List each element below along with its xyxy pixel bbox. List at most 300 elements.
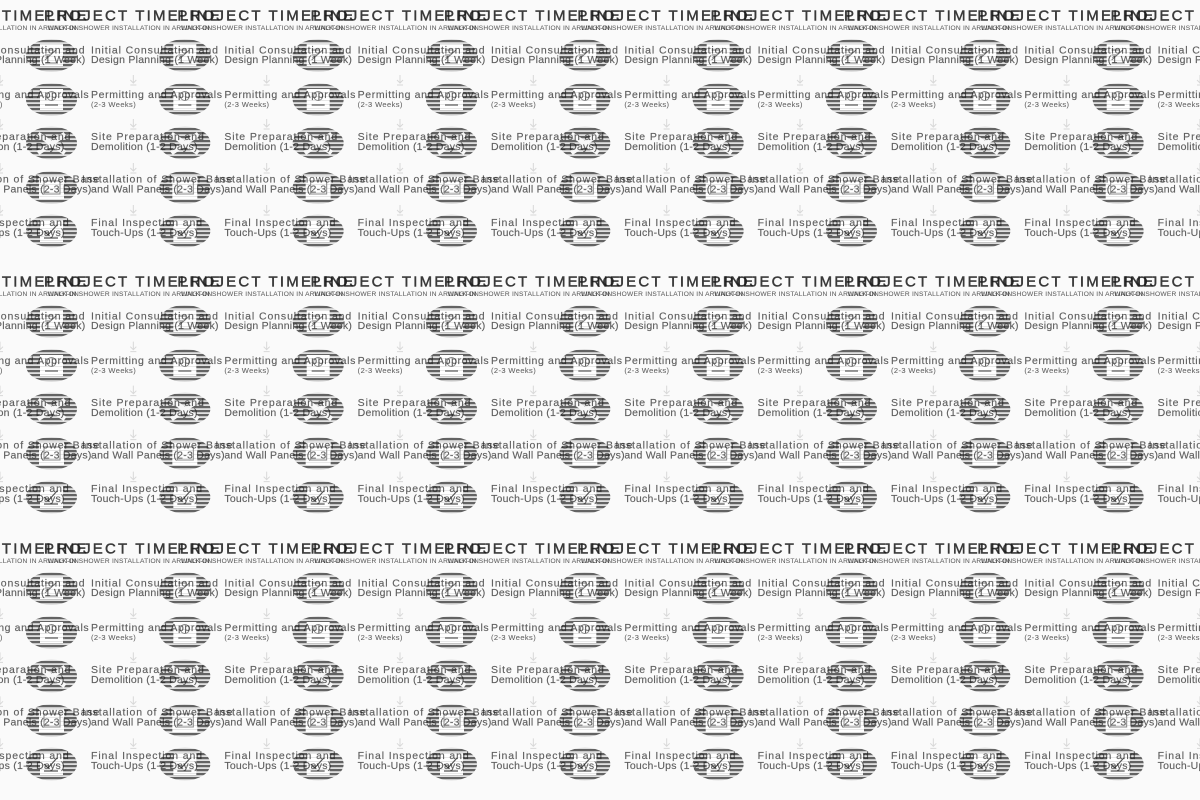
text tile r1c3: Initial Consultation and	[358, 44, 486, 56]
text tile r2c4: (2-3 Weeks)	[491, 366, 536, 375]
text tile r1c8: Initial Consultation and	[1024, 44, 1152, 56]
text tile r2c1: PROJECT TIMELINE	[44, 274, 222, 290]
text tile r3c1: Site Preparation and	[91, 664, 205, 676]
text tile r2c9	[1111, 274, 1200, 505]
text tile r1c4	[444, 8, 634, 239]
text tile r2c1: Final Inspection and	[91, 483, 203, 495]
text tile r2c8: Demolition (1-2 Days)	[1024, 407, 1131, 419]
text tile r1c7: Demolition (1-2 Days)	[891, 141, 998, 153]
text tile r3c1: Final Inspection and	[91, 750, 203, 762]
text tile r2c6: Design Planning (1 Week)	[758, 320, 885, 332]
text tile r1c5: PROJECT TIMELINE	[577, 8, 755, 24]
text tile r3c5: Site Preparation and	[624, 664, 738, 676]
text tile r2c7: Permitting and Approvals	[891, 355, 1023, 367]
text tile r2c5: Permitting and Approvals	[624, 355, 756, 367]
text tile r3c7: WALK-IN SHOWER INSTALLATION IN ARLINGTON	[848, 558, 1012, 565]
text tile r3c5: Touch-Ups (1-2 Days)	[624, 760, 731, 772]
text tile r1c5: Initial Consultation and	[624, 44, 752, 56]
text tile r2c1: (2-3 Weeks)	[91, 366, 136, 375]
text tile r2c4: Touch-Ups (1-2 Days)	[491, 493, 598, 505]
text tile r1c4: Design Planning (1 Week)	[491, 54, 619, 66]
text tile r3c4: Permitting and Approvals	[491, 622, 623, 634]
text tile r1c9	[1111, 8, 1200, 239]
text tile r3c6: Touch-Ups (1-2 Days)	[758, 760, 865, 772]
text tile r2c8: PROJECT TIMELINE	[977, 274, 1155, 290]
text tile r3c7: and Wall Panels (2-3 Days)	[891, 716, 1025, 728]
text tile r1c3: Site Preparation and	[358, 131, 471, 143]
text tile r1c4: Permitting and Approvals	[491, 89, 623, 101]
text tile r3c3: Installation of Shower Base	[349, 706, 500, 718]
text tile r1c5: Design Planning (1 Week)	[624, 54, 752, 66]
text tile r2c5: Touch-Ups (1-2 Days)	[624, 493, 731, 505]
text tile r1c7: Final Inspection and	[891, 217, 1003, 229]
text tile r1c0	[0, 8, 100, 239]
text tile r2c4	[444, 274, 634, 505]
text tile r3c3: and Wall Panels (2-3 Days)	[358, 716, 492, 728]
text tile r2c7: (2-3 Weeks)	[891, 366, 936, 375]
text tile r1c3	[311, 8, 500, 239]
text tile r2c1: Installation of Shower Base	[82, 440, 234, 452]
icons: striped circles, row 2	[26, 305, 1144, 514]
arrows: step connectors, row 3	[0, 608, 1200, 748]
text tile r1c2: Design Planning (1 Week)	[224, 54, 352, 66]
text tile r3c3: Touch-Ups (1-2 Days)	[358, 760, 465, 772]
text tile r3c5	[577, 540, 767, 772]
text tile r1c1: Demolition (1-2 Days)	[91, 141, 198, 153]
text tile r1c4: Initial Consultation and	[491, 44, 619, 56]
text tile r2c5	[577, 274, 767, 505]
text tile r1c6	[711, 8, 900, 239]
text tile r2c2: Permitting and Approvals	[224, 355, 356, 367]
text tile r1c8: Demolition (1-2 Days)	[1024, 141, 1131, 153]
text tile r3c5: Design Planning (1 Week)	[624, 587, 752, 599]
text tile r2c6	[711, 274, 900, 505]
text tile r2c7: Design Planning (1 Week)	[891, 320, 1019, 332]
text tile r2c6: PROJECT TIMELINE	[711, 274, 889, 290]
text tile r3c5: Final Inspection and	[624, 750, 736, 762]
text tile r2c7: WALK-IN SHOWER INSTALLATION IN ARLINGTON	[848, 291, 1012, 298]
text tile r3c7	[844, 540, 1034, 772]
text tile r1c2: (2-3 Weeks)	[224, 100, 270, 109]
text tile r3c6: Final Inspection and	[758, 750, 870, 762]
text tile r1c5: Installation of Shower Base	[615, 174, 767, 186]
text tile r3c6: Initial Consultation and	[758, 578, 886, 590]
text tile r2c2: Initial Consultation and	[224, 310, 352, 322]
text tile r3c8: Site Preparation and	[1024, 664, 1138, 676]
text tile r3c8: Installation of Shower Base	[1015, 706, 1167, 718]
text tile r2c4: Installation of Shower Base	[482, 440, 634, 452]
text tile r1c3: PROJECT TIMELINE	[311, 8, 489, 24]
text tile r1c2: Site Preparation and	[224, 131, 338, 143]
text tile r3c1: and Wall Panels (2-3 Days)	[91, 716, 225, 728]
text tile r3c5: Installation of Shower Base	[615, 706, 767, 718]
text tile r1c2: PROJECT TIMELINE	[177, 8, 355, 24]
text tile r1c4: Demolition (1-2 Days)	[491, 141, 598, 153]
text tile r2c8: and Wall Panels (2-3 Days)	[1024, 450, 1158, 462]
text tile r1c8: Installation of Shower Base	[1015, 174, 1167, 186]
text tile r2c7	[844, 274, 1034, 505]
text tile r1c2: Demolition (1-2 Days)	[224, 141, 331, 153]
text tile r2c5: Site Preparation and	[624, 397, 738, 409]
text tile r3c1: Demolition (1-2 Days)	[91, 674, 198, 686]
text tile r3c7: PROJECT TIMELINE	[844, 540, 1022, 558]
text tile r2c2: PROJECT TIMELINE	[177, 274, 355, 290]
text tile r1c3: and Wall Panels (2-3 Days)	[358, 184, 492, 196]
text tile r3c5: and Wall Panels (2-3 Days)	[624, 716, 758, 728]
text tile r2c7: Site Preparation and	[891, 397, 1005, 409]
text tile r3c8: WALK-IN SHOWER INSTALLATION IN ARLINGTON	[981, 558, 1146, 565]
text tile r3c2: Installation of Shower Base	[215, 706, 367, 718]
text tile r2c8: Final Inspection and	[1024, 483, 1136, 495]
text tile r1c5: (2-3 Weeks)	[624, 100, 670, 109]
text tile r3c7: Design Planning (1 Week)	[891, 587, 1019, 599]
text tile r1c8: Permitting and Approvals	[1024, 89, 1156, 101]
text tile r3c6: Permitting and Approvals	[758, 622, 889, 634]
text tile r1c4: PROJECT TIMELINE	[444, 8, 622, 24]
text tile r2c6: Touch-Ups (1-2 Days)	[758, 493, 865, 505]
text tile r3c8: Design Planning (1 Week)	[1024, 587, 1152, 599]
text tile r3c3: Permitting and Approvals	[358, 622, 489, 634]
text tile r2c1: Initial Consultation and	[91, 310, 219, 322]
text tile r2c3: Design Planning (1 Week)	[358, 320, 485, 332]
text tile r3c6: WALK-IN SHOWER INSTALLATION IN ARLINGTON	[714, 558, 879, 565]
text tile r3c6: Installation of Shower Base	[749, 706, 900, 718]
text tile r3c2: Initial Consultation and	[224, 578, 352, 590]
text tile r3c3: (2-3 Weeks)	[358, 633, 403, 642]
text tile r3c3: WALK-IN SHOWER INSTALLATION IN ARLINGTON	[314, 558, 479, 565]
text tile r3c1: PROJECT TIMELINE	[44, 540, 222, 558]
text tile r3c2: Touch-Ups (1-2 Days)	[224, 760, 331, 772]
text tile r2c3: (2-3 Weeks)	[358, 366, 403, 375]
text tile r2c5: Initial Consultation and	[624, 310, 752, 322]
text tile r1c6: PROJECT TIMELINE	[711, 8, 889, 24]
text tile r2c6: Initial Consultation and	[758, 310, 886, 322]
text tile r2c2: Demolition (1-2 Days)	[224, 407, 331, 419]
text tile r1c8: Design Planning (1 Week)	[1024, 54, 1152, 66]
text tile r3c7: Demolition (1-2 Days)	[891, 674, 998, 686]
icons: striped circles, row 1	[26, 39, 1144, 248]
text tile r3c4: Final Inspection and	[491, 750, 603, 762]
text tile r2c5: and Wall Panels (2-3 Days)	[624, 450, 758, 462]
text tile r1c6: Final Inspection and	[758, 217, 870, 229]
text tile r3c5: PROJECT TIMELINE	[577, 540, 755, 558]
arrows: step connectors, row 2	[0, 342, 1200, 482]
text tile r3c5: (2-3 Weeks)	[624, 633, 670, 642]
text tile r3c2: WALK-IN SHOWER INSTALLATION IN ARLINGTON	[181, 558, 346, 565]
text tile r2c2	[177, 274, 367, 505]
text tile r1c6: Demolition (1-2 Days)	[758, 141, 864, 153]
text tile r3c3: Demolition (1-2 Days)	[358, 674, 464, 686]
text tile r3c6: Demolition (1-2 Days)	[758, 674, 864, 686]
text tile r1c3: Permitting and Approvals	[358, 89, 489, 101]
text tile r1c8: and Wall Panels (2-3 Days)	[1024, 184, 1158, 196]
text tile r3c7: Final Inspection and	[891, 750, 1003, 762]
text tile r2c3: PROJECT TIMELINE	[311, 274, 489, 290]
text tile r1c3: Touch-Ups (1-2 Days)	[358, 227, 465, 239]
text tile r1c5: WALK-IN SHOWER INSTALLATION IN ARLINGTON	[581, 25, 746, 32]
text tile r1c6: Design Planning (1 Week)	[758, 54, 885, 66]
text tile r1c8: Final Inspection and	[1024, 217, 1136, 229]
text tile r2c7: and Wall Panels (2-3 Days)	[891, 450, 1025, 462]
text tile r1c4: Final Inspection and	[491, 217, 603, 229]
text tile r2c3: Demolition (1-2 Days)	[358, 407, 464, 419]
text tile r2c3	[311, 274, 500, 505]
text tile r2c4: Design Planning (1 Week)	[491, 320, 619, 332]
text tile r2c4: Permitting and Approvals	[491, 355, 623, 367]
text tile r1c8: Touch-Ups (1-2 Days)	[1024, 227, 1131, 239]
text tile r3c4: Touch-Ups (1-2 Days)	[491, 760, 598, 772]
text tile r2c6: WALK-IN SHOWER INSTALLATION IN ARLINGTON	[714, 291, 879, 298]
text tile r3c8: Initial Consultation and	[1024, 578, 1152, 590]
text tile r3c7: Touch-Ups (1-2 Days)	[891, 760, 998, 772]
text tile r1c6: and Wall Panels (2-3 Days)	[758, 184, 892, 196]
text tile r2c2: WALK-IN SHOWER INSTALLATION IN ARLINGTON	[181, 291, 346, 298]
text tile r1c6: Initial Consultation and	[758, 44, 886, 56]
text tile r1c8: PROJECT TIMELINE	[977, 8, 1155, 24]
text tile r2c1: and Wall Panels (2-3 Days)	[91, 450, 225, 462]
text tile r3c2: Design Planning (1 Week)	[224, 587, 352, 599]
text tile r2c1: Design Planning (1 Week)	[91, 320, 219, 332]
text tile r2c8: WALK-IN SHOWER INSTALLATION IN ARLINGTON	[981, 291, 1146, 298]
text tile r1c1: WALK-IN SHOWER INSTALLATION IN ARLINGTON	[48, 25, 212, 32]
text tile r2c4: Demolition (1-2 Days)	[491, 407, 598, 419]
text tile r3c7: (2-3 Weeks)	[891, 633, 936, 642]
text tile r1c7: Permitting and Approvals	[891, 89, 1023, 101]
text tile r2c8: Design Planning (1 Week)	[1024, 320, 1152, 332]
text tile r3c8: (2-3 Weeks)	[1024, 633, 1070, 642]
text tile r2c8: (2-3 Weeks)	[1024, 366, 1070, 375]
text tile r3c2: Permitting and Approvals	[224, 622, 356, 634]
text tile r2c4: Initial Consultation and	[491, 310, 619, 322]
text tile r2c7: Touch-Ups (1-2 Days)	[891, 493, 998, 505]
text tile r2c5: Demolition (1-2 Days)	[624, 407, 731, 419]
text tile r1c1: Touch-Ups (1-2 Days)	[91, 227, 198, 239]
text tile r2c5: Installation of Shower Base	[615, 440, 767, 452]
text tile r2c6: Permitting and Approvals	[758, 355, 889, 367]
text tile r2c5: Design Planning (1 Week)	[624, 320, 752, 332]
text tile r1c7: Touch-Ups (1-2 Days)	[891, 227, 998, 239]
text tile r1c3: WALK-IN SHOWER INSTALLATION IN ARLINGTON	[314, 25, 479, 32]
text tile r2c7: Final Inspection and	[891, 483, 1003, 495]
text tile r1c2: WALK-IN SHOWER INSTALLATION IN ARLINGTON	[181, 25, 346, 32]
text tile r3c4: Installation of Shower Base	[482, 706, 634, 718]
text tile r3c6	[711, 540, 900, 772]
text tile r1c3: Final Inspection and	[358, 217, 470, 229]
text tile r2c3: Touch-Ups (1-2 Days)	[358, 493, 465, 505]
text tile r1c4: Touch-Ups (1-2 Days)	[491, 227, 598, 239]
text tile r2c1: Site Preparation and	[91, 397, 205, 409]
text tile r3c2: Site Preparation and	[224, 664, 338, 676]
text tile r1c1: PROJECT TIMELINE	[44, 8, 222, 24]
text tile r2c3: WALK-IN SHOWER INSTALLATION IN ARLINGTON	[314, 291, 479, 298]
text tile r3c3: Site Preparation and	[358, 664, 471, 676]
text tile r2c6: Site Preparation and	[758, 397, 871, 409]
text tile r3c1: WALK-IN SHOWER INSTALLATION IN ARLINGTON	[48, 558, 212, 565]
text tile r2c6: (2-3 Weeks)	[758, 366, 803, 375]
text tile r1c1: Initial Consultation and	[91, 44, 219, 56]
text tile r2c8	[977, 274, 1167, 505]
text tile r3c3: PROJECT TIMELINE	[311, 540, 489, 558]
text tile r3c1: Permitting and Approvals	[91, 622, 223, 634]
text tile r1c2: Installation of Shower Base	[215, 174, 367, 186]
text tile r3c4: Site Preparation and	[491, 664, 605, 676]
text tile r1c1: Final Inspection and	[91, 217, 203, 229]
text tile r2c8: Site Preparation and	[1024, 397, 1138, 409]
text tile r3c5: Demolition (1-2 Days)	[624, 674, 731, 686]
text tile r2c2: Touch-Ups (1-2 Days)	[224, 493, 331, 505]
text tile r1c6: Site Preparation and	[758, 131, 871, 143]
text tile r1c5: Site Preparation and	[624, 131, 738, 143]
text tile r2c4: PROJECT TIMELINE	[444, 274, 622, 290]
text tile r2c3: Site Preparation and	[358, 397, 471, 409]
text tile r1c4: WALK-IN SHOWER INSTALLATION IN ARLINGTON	[448, 25, 612, 32]
text tile r3c4: Demolition (1-2 Days)	[491, 674, 598, 686]
text tile r1c6: WALK-IN SHOWER INSTALLATION IN ARLINGTON	[714, 25, 879, 32]
text tile r2c7: Initial Consultation and	[891, 310, 1019, 322]
text tile r3c2: PROJECT TIMELINE	[177, 540, 355, 558]
text tile r1c1: Permitting and Approvals	[91, 89, 223, 101]
text tile r2c6: Final Inspection and	[758, 483, 870, 495]
text tile r2c2: Final Inspection and	[224, 483, 336, 495]
text tile r3c8: Permitting and Approvals	[1024, 622, 1156, 634]
text tile r2c5: Final Inspection and	[624, 483, 736, 495]
text tile r3c9	[1111, 540, 1200, 772]
text tile r3c1	[44, 540, 234, 772]
text tile r3c5: WALK-IN SHOWER INSTALLATION IN ARLINGTON	[581, 558, 746, 565]
text tile r2c4: Final Inspection and	[491, 483, 603, 495]
text tile r2c4: Site Preparation and	[491, 397, 605, 409]
text tile r1c4: and Wall Panels (2-3 Days)	[491, 184, 625, 196]
text tile r3c5: Permitting and Approvals	[624, 622, 756, 634]
text tile r1c3: Demolition (1-2 Days)	[358, 141, 464, 153]
text tile r3c8	[977, 540, 1167, 772]
text tile r1c6: Installation of Shower Base	[749, 174, 900, 186]
text tile r3c7: Site Preparation and	[891, 664, 1005, 676]
text tile r2c3: Initial Consultation and	[358, 310, 486, 322]
text tile r1c4: Site Preparation and	[491, 131, 605, 143]
text tile r3c3	[311, 540, 500, 772]
text tile r3c4: WALK-IN SHOWER INSTALLATION IN ARLINGTON	[448, 558, 612, 565]
text tile r3c4	[444, 540, 634, 772]
text tile r1c2: Touch-Ups (1-2 Days)	[224, 227, 331, 239]
text tile r3c4: Initial Consultation and	[491, 578, 619, 590]
text tile r3c4: and Wall Panels (2-3 Days)	[491, 716, 625, 728]
text tile r3c6: Site Preparation and	[758, 664, 871, 676]
text tile r1c2: Permitting and Approvals	[224, 89, 356, 101]
text tile r2c2: and Wall Panels (2-3 Days)	[224, 450, 358, 462]
text tile r1c7: Initial Consultation and	[891, 44, 1019, 56]
text tile r2c1: WALK-IN SHOWER INSTALLATION IN ARLINGTON	[48, 291, 212, 298]
text tile r2c3: and Wall Panels (2-3 Days)	[358, 450, 492, 462]
text tile r2c8: Installation of Shower Base	[1015, 440, 1167, 452]
text tile r2c4: WALK-IN SHOWER INSTALLATION IN ARLINGTON	[448, 291, 612, 298]
text tile r1c7: Installation of Shower Base	[882, 174, 1034, 186]
text tile r1c1: Installation of Shower Base	[82, 174, 234, 186]
text tile r3c3: Initial Consultation and	[358, 578, 486, 590]
text tile r2c8: Initial Consultation and	[1024, 310, 1152, 322]
text tile r3c5: Initial Consultation and	[624, 578, 752, 590]
text tile r2c2: (2-3 Weeks)	[224, 366, 270, 375]
text tile r1c2	[177, 8, 367, 239]
text tile r1c8: WALK-IN SHOWER INSTALLATION IN ARLINGTON	[981, 25, 1146, 32]
text tile r3c6: PROJECT TIMELINE	[711, 540, 889, 558]
text tile r1c1: Site Preparation and	[91, 131, 205, 143]
text tile r1c8: Site Preparation and	[1024, 131, 1138, 143]
text tile r2c7: Installation of Shower Base	[882, 440, 1034, 452]
text tile r2c6: Installation of Shower Base	[749, 440, 900, 452]
text tile r3c3: Final Inspection and	[358, 750, 470, 762]
text tile r3c8: and Wall Panels (2-3 Days)	[1024, 716, 1158, 728]
text tile r3c1: Installation of Shower Base	[82, 706, 234, 718]
text tile r3c8: PROJECT TIMELINE	[977, 540, 1155, 558]
text tile r1c7: (2-3 Weeks)	[891, 100, 936, 109]
text tile r1c7: Design Planning (1 Week)	[891, 54, 1019, 66]
icons: striped circles, row 3	[26, 572, 1144, 780]
text tile r2c6: and Wall Panels (2-3 Days)	[758, 450, 892, 462]
text tile r3c2: and Wall Panels (2-3 Days)	[224, 716, 358, 728]
text tile r3c2: Final Inspection and	[224, 750, 336, 762]
text tile r3c6: Design Planning (1 Week)	[758, 587, 885, 599]
text tile r1c7: WALK-IN SHOWER INSTALLATION IN ARLINGTON	[848, 25, 1012, 32]
text tile r2c5: WALK-IN SHOWER INSTALLATION IN ARLINGTON	[581, 291, 746, 298]
text tile r1c5: Touch-Ups (1-2 Days)	[624, 227, 731, 239]
text tile r1c5: and Wall Panels (2-3 Days)	[624, 184, 758, 196]
text tile r3c1: Design Planning (1 Week)	[91, 587, 219, 599]
text tile r3c4: Design Planning (1 Week)	[491, 587, 619, 599]
text tile r2c8: Touch-Ups (1-2 Days)	[1024, 493, 1131, 505]
text tile r1c5: Final Inspection and	[624, 217, 736, 229]
text tile r1c7: Site Preparation and	[891, 131, 1005, 143]
text tile r1c2: Initial Consultation and	[224, 44, 352, 56]
text tile r1c7: and Wall Panels (2-3 Days)	[891, 184, 1025, 196]
text tile r1c1: and Wall Panels (2-3 Days)	[91, 184, 225, 196]
text tile r1c4: (2-3 Weeks)	[491, 100, 536, 109]
text tile r1c2: and Wall Panels (2-3 Days)	[224, 184, 358, 196]
arrows: step connectors, row 1	[0, 75, 1200, 215]
text tile r2c4: and Wall Panels (2-3 Days)	[491, 450, 625, 462]
text tile r1c6: Permitting and Approvals	[758, 89, 889, 101]
text tile r2c3: Installation of Shower Base	[349, 440, 500, 452]
text tile r3c6: and Wall Panels (2-3 Days)	[758, 716, 892, 728]
text tile r3c4: (2-3 Weeks)	[491, 633, 536, 642]
text tile r1c7: PROJECT TIMELINE	[844, 8, 1022, 24]
text tile r3c8: Demolition (1-2 Days)	[1024, 674, 1131, 686]
text tile r2c2: Site Preparation and	[224, 397, 338, 409]
text tile r1c4: Installation of Shower Base	[482, 174, 634, 186]
text tile r1c8	[977, 8, 1167, 239]
text tile r3c2: Demolition (1-2 Days)	[224, 674, 331, 686]
text tile r3c0	[0, 540, 100, 772]
text tile r3c2	[177, 540, 367, 772]
text tile r2c2: Installation of Shower Base	[215, 440, 367, 452]
text tile r2c1	[44, 274, 234, 505]
text tile r1c8: (2-3 Weeks)	[1024, 100, 1070, 109]
text tile r2c7: Demolition (1-2 Days)	[891, 407, 998, 419]
text tile r1c1: (2-3 Weeks)	[91, 100, 136, 109]
text tile r2c1: Permitting and Approvals	[91, 355, 223, 367]
text tile r2c8: Permitting and Approvals	[1024, 355, 1156, 367]
text tile r1c6: Touch-Ups (1-2 Days)	[758, 227, 865, 239]
text tile r3c7: Installation of Shower Base	[882, 706, 1034, 718]
text tile r2c6: Demolition (1-2 Days)	[758, 407, 864, 419]
text tile r1c7	[844, 8, 1034, 239]
text tile r2c3: Final Inspection and	[358, 483, 470, 495]
text tile r2c1: Demolition (1-2 Days)	[91, 407, 198, 419]
text tile r1c1: Design Planning (1 Week)	[91, 54, 219, 66]
text tile r1c1	[44, 8, 234, 239]
text tile r3c7: Permitting and Approvals	[891, 622, 1023, 634]
text tile r2c5: (2-3 Weeks)	[624, 366, 670, 375]
